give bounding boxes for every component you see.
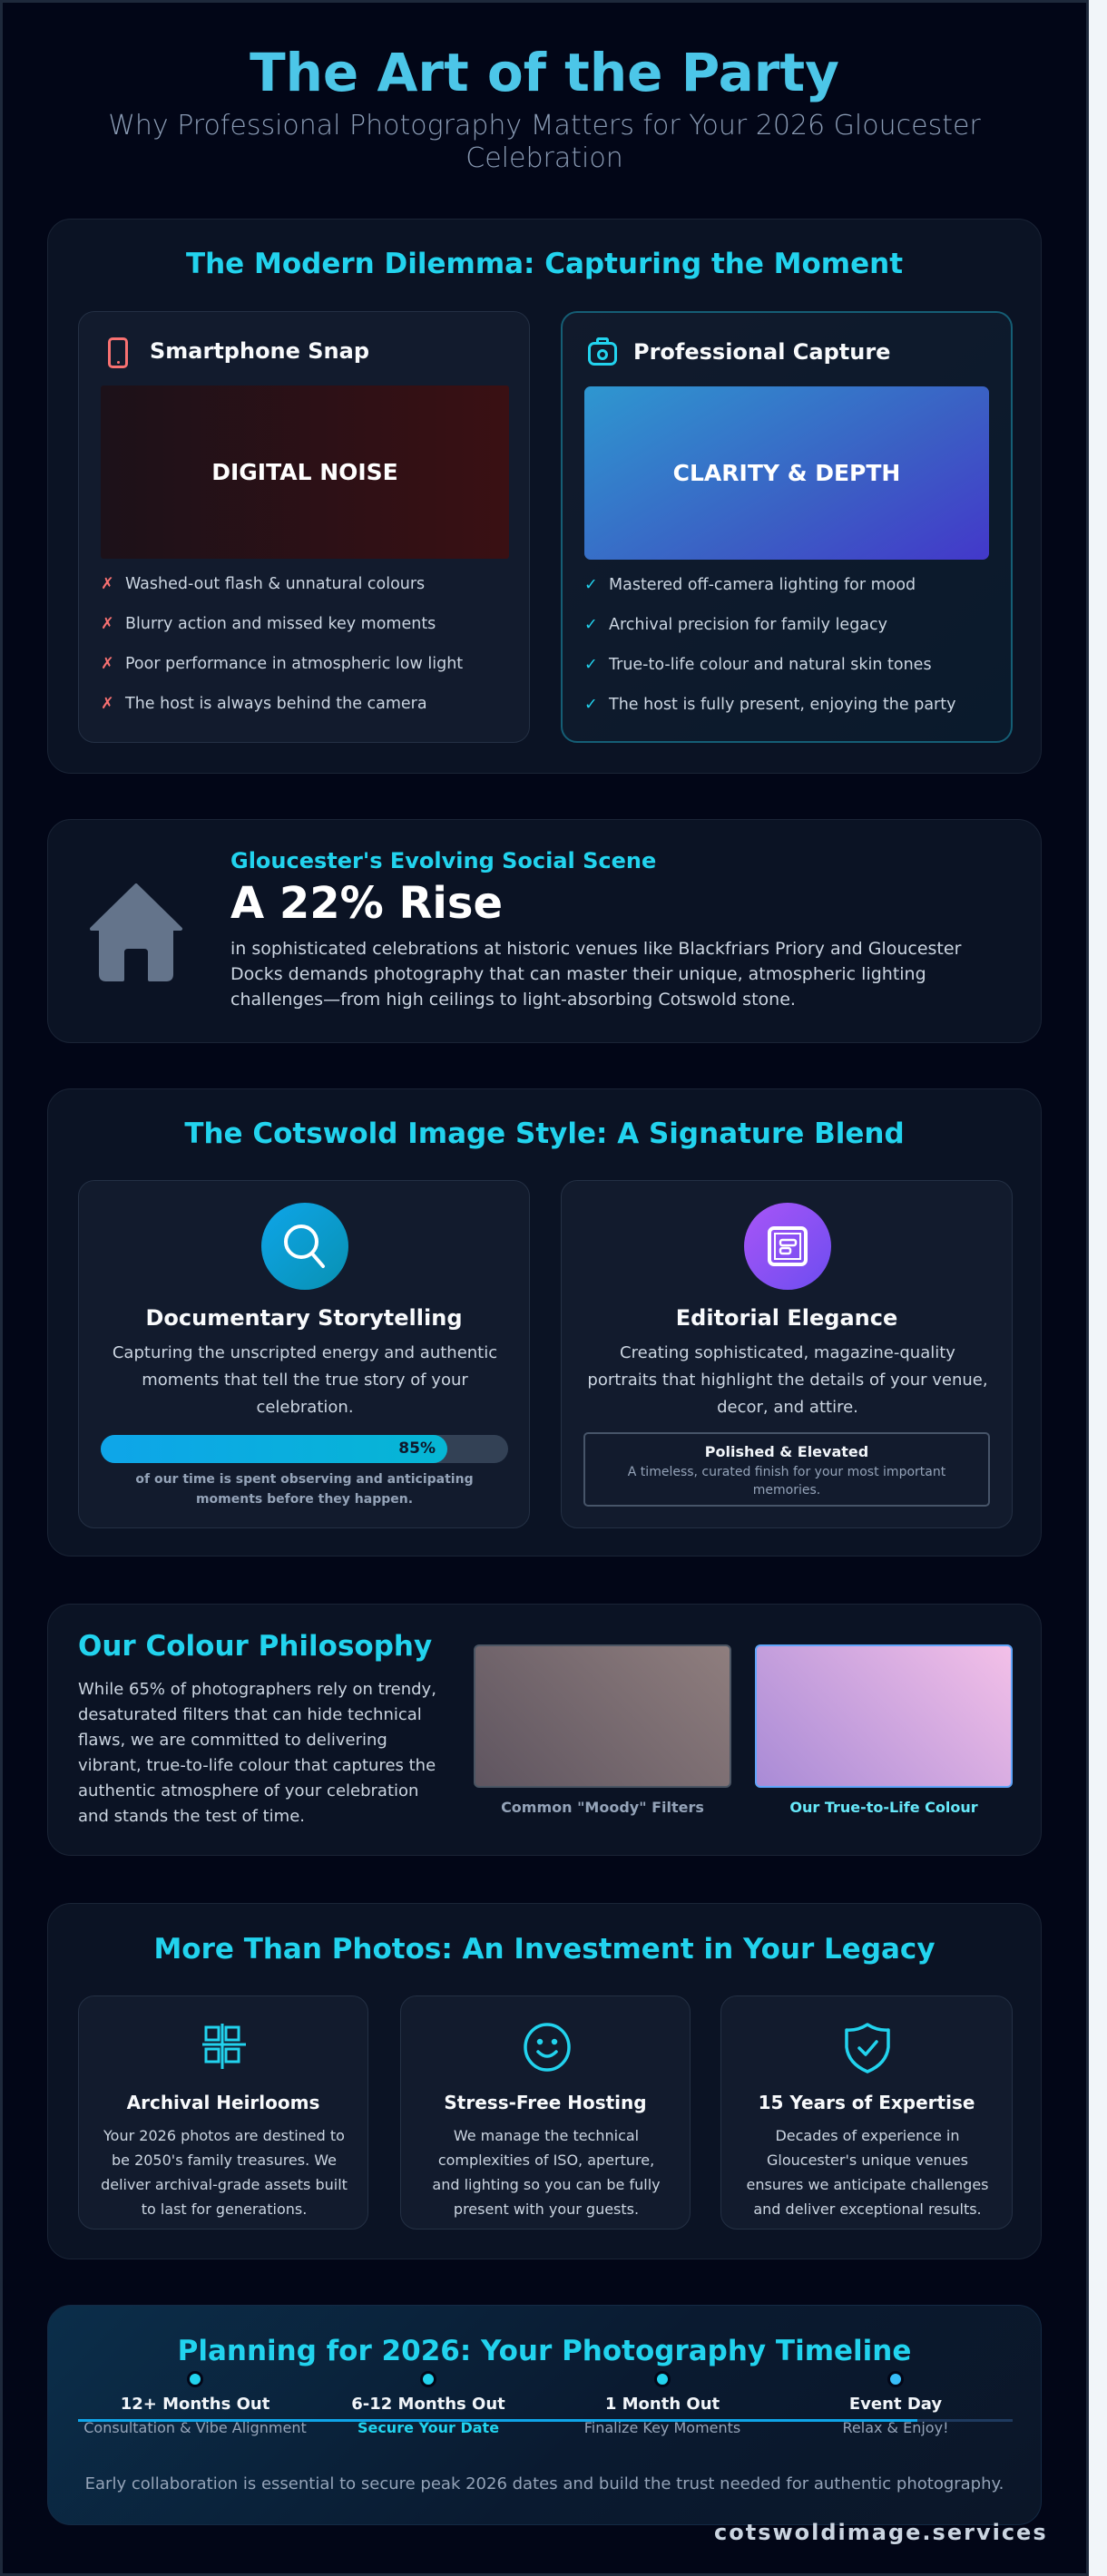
icon: house [90,883,183,981]
title: The Art of the Party [250,42,839,103]
image: digital noise [101,385,509,559]
description: Creating sophisticated, magazine-quality [620,1343,955,1362]
step: 12+ months: Consultation & Vibe Alignment [83,2419,307,2436]
callout: polished: A timeless, curated finish for your most important memories. [628,1465,945,1498]
text block [230,848,962,1010]
card: smartphone [78,311,530,743]
list: cons: Poor performance in atmospheric low light [125,655,463,673]
card title: Professional Capture [633,339,890,365]
description: ensures we anticipate challenges [746,2176,989,2193]
list: pros: ✓ [584,696,598,714]
list: cons: ✗ [101,695,114,713]
list: pros: ✓ [584,576,598,594]
heading: More Than Photos: An Investment in Your Legacy [153,1933,936,1966]
subtitle: Why Professional Photography Matters for Your 2026 Gloucester Celebration [108,110,981,174]
panel: colour philosophy [47,1604,1042,1856]
panel: timeline [47,2305,1042,2525]
step: 1 month: 1 Month Out [605,2395,720,2414]
description: portraits that highlight the details of your venue, [587,1371,988,1390]
text block: Gloucester's Evolving Social Scene [230,848,656,873]
swatch: true-to-life: Our True-to-Life Colour [789,1799,978,1816]
card title: 15 Years of Expertise [759,2092,975,2113]
list: pros: The host is fully present, enjoying the party [609,696,955,714]
list: pros: True-to-life colour and natural skin tones [609,656,932,674]
image: digital noise: DIGITAL NOISE [211,459,398,485]
card: stress-free [400,1995,691,2230]
card title: Editorial Elegance [676,1305,897,1331]
panel: legacy [47,1903,1042,2259]
progress bar 85%: 85% [398,1439,436,1458]
description: deliver archival-grade assets built [101,2176,348,2193]
list: cons [101,575,463,713]
swatch: moody [474,1644,731,1816]
swatch: true-to-life [755,1644,1013,1816]
text block: While 65% of photographers rely on trendy, desaturated filters that can hide technical flaws, we are committed to delivering vibrant, true-to-life colour that captures the authentic atmosphere of your celebration and stands the test of time. [78,1680,436,1826]
heading: Our Colour Philosophy [78,1630,432,1663]
list: cons: ✗ [101,615,114,633]
list: pros [584,576,955,714]
card title: Documentary Storytelling [145,1305,463,1331]
footnote: Early collaboration is essential to secure peak 2026 dates and build the trust needed for authentic photography. [85,2474,1004,2493]
card title: Smartphone Snap [150,338,369,364]
icon: phone [108,337,128,368]
description: Decades of experience in [775,2127,960,2144]
panel: signature blend [47,1088,1042,1556]
list: cons: The host is always behind the camera [125,695,427,713]
step: event day: Event Day [849,2395,942,2414]
description [432,2127,661,2218]
card: expertise [720,1995,1013,2230]
step: event day: Relax & Enjoy! [842,2419,948,2436]
description: Your 2026 photos are destined to [103,2127,345,2144]
progress bar 85% [101,1435,508,1463]
heading: The Modern Dilemma: Capturing the Moment [186,248,903,280]
callout: polished [583,1432,990,1507]
panel: social scene [47,819,1042,1043]
heading: Planning for 2026: Your Photography Timeline [178,2335,911,2367]
heading: The Cotswold Image Style: A Signature Blend [184,1117,905,1150]
card title: Archival Heirlooms [127,2092,319,2113]
description: complexities of ISO, aperture, [438,2152,654,2169]
step: 6-12 months: Secure Your Date [358,2419,499,2436]
description: present with your guests. [454,2200,639,2218]
step: 12+ months: 12+ Months Out [121,2395,269,2414]
description [101,2127,348,2218]
list: pros: Mastered off-camera lighting for mood [609,576,916,594]
card: documentary [78,1180,530,1528]
description: We manage the technical [454,2127,639,2144]
description [587,1343,988,1417]
list: pros: ✓ [584,656,598,674]
step: 6-12 months [351,2371,505,2436]
description: and lighting so you can be fully [432,2176,661,2193]
description: Capturing the unscripted energy and authentic moments that tell the true story of your celebration. [113,1343,497,1417]
icon: camera [588,342,617,366]
panel: modern dilemma [47,219,1042,774]
description: and deliver exceptional results. [753,2200,982,2218]
description: Gloucester's unique venues [767,2152,968,2169]
icon: magnifier [261,1203,348,1290]
step: 6-12 months: 6-12 Months Out [351,2395,505,2414]
list: cons: Blurry action and missed key moments [125,615,436,633]
image: clarity [584,386,989,560]
timeline line [78,2419,1013,2422]
icon: frame [744,1203,831,1290]
text block: in sophisticated celebrations at historic venues like Blackfriars Priory and Gloucester Docks demands photography that can master their unique, atmospheric lighting challenges—from high ceilings to light-absorbing Cotswold stone. [230,939,961,1010]
icon: smiley [524,2023,571,2072]
card: editorial [561,1180,1013,1528]
text block: A 22% Rise [230,878,503,929]
step: event day [842,2371,948,2436]
description: decor, and attire. [717,1398,858,1417]
step: 1 month: Finalize Key Moments [584,2419,740,2436]
step: 1 month [584,2371,740,2436]
list: pros: ✓ [584,616,598,634]
step: 12+ months [83,2371,307,2436]
caption: of our time is spent observing and anticipating moments before they happen. [135,1472,474,1507]
description [746,2127,989,2218]
callout: polished: Polished & Elevated [705,1443,868,1460]
list: cons: Washed-out flash & unnatural colours [125,575,425,593]
list: pros: Archival precision for family legacy [609,616,887,634]
list: cons: ✗ [101,575,114,593]
footer: brand: cotswoldimage.services [714,2520,1048,2545]
icon: grid [202,2024,246,2069]
card: professional [561,311,1013,743]
card: archival [78,1995,368,2230]
list: cons: ✗ [101,655,114,673]
image: clarity: CLARITY & DEPTH [673,460,900,486]
description: to last for generations. [142,2200,307,2218]
icon: shield [845,2023,890,2073]
card title: Stress-Free Hosting [444,2092,647,2113]
swatch: moody: Common "Moody" Filters [501,1799,704,1816]
description: be 2050's family treasures. We [112,2152,337,2169]
